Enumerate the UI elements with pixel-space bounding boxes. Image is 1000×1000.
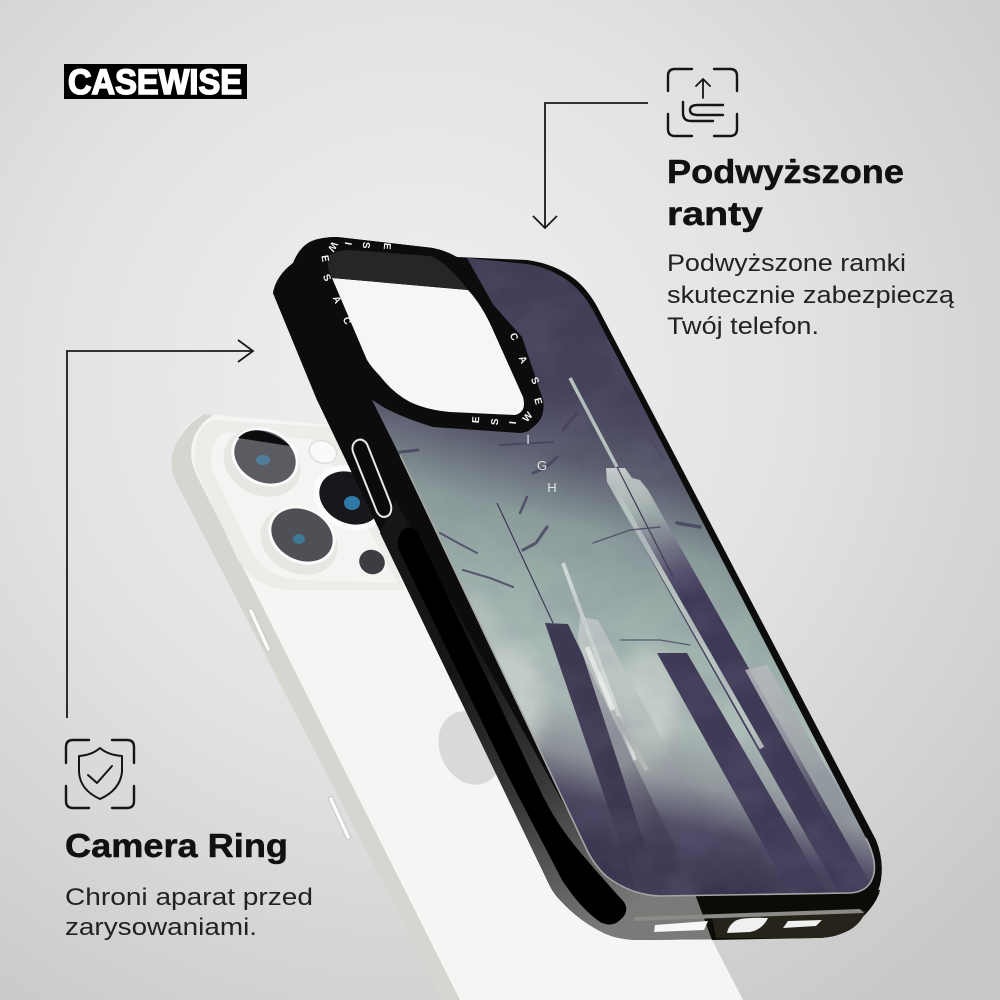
ring lettering: E — [471, 416, 482, 424]
tower: pale mist — [578, 617, 671, 838]
side button — [352, 440, 391, 517]
print letters: G — [537, 458, 547, 473]
text: camera ring description: Chroni aparat przed — [65, 884, 313, 911]
text: raised edges description: skutecznie zabezpieczą — [667, 282, 955, 309]
ring lettering: W — [325, 239, 339, 254]
ring inner wall — [328, 250, 468, 290]
tower: right pale top and dark base — [606, 468, 870, 884]
ring lettering — [318, 239, 544, 426]
ring lettering: S — [490, 418, 501, 426]
tower: right light — [745, 665, 850, 816]
print letters — [527, 435, 556, 492]
camera window — [332, 278, 524, 415]
tower: middle dark — [657, 653, 814, 872]
lens: top left — [212, 416, 312, 510]
heading: Podwyższone ranty: Podwyższone — [667, 153, 904, 190]
icon: shield — [66, 740, 134, 808]
heading: Podwyższone ranty — [667, 153, 904, 232]
lidar sensor — [355, 545, 389, 579]
light bars — [497, 378, 762, 770]
text: raised edges description: Twój telefon. — [667, 313, 819, 340]
arrow: camera ring — [67, 340, 253, 718]
frame side opening — [398, 528, 626, 925]
heading: Podwyższone ranty: ranty — [667, 195, 764, 232]
marble cracks — [398, 412, 702, 646]
ring lettering: A — [330, 294, 343, 306]
apple logo shadow — [427, 701, 513, 795]
print edge highlight — [400, 455, 874, 896]
ring lettering: E — [531, 397, 544, 406]
flash — [306, 437, 340, 467]
ring lettering: I — [342, 241, 353, 246]
bottom black lip — [695, 890, 880, 940]
port: speaker right — [783, 920, 822, 928]
ring lettering: C — [340, 315, 353, 327]
logo: CASEWISE: CASEWISE — [68, 63, 242, 102]
text: raised edges description — [667, 250, 955, 340]
phone side button — [248, 608, 271, 652]
camera ring — [273, 237, 544, 433]
tower: left dark — [545, 623, 671, 840]
ring lettering: C — [507, 331, 520, 343]
icon: raised edges — [668, 69, 737, 136]
white phone body — [171, 414, 743, 1000]
ring lettering: E — [318, 254, 331, 263]
phone lower side button — [328, 796, 351, 840]
arrow: raised edges — [533, 103, 648, 228]
ring lettering: S — [528, 376, 541, 387]
marble texture — [480, 313, 868, 895]
lens: bottom — [249, 494, 349, 588]
ring lettering: I — [508, 421, 519, 425]
black case — [273, 237, 882, 940]
text: camera ring description: zarysowaniami. — [65, 914, 257, 941]
ring lettering: W — [521, 410, 536, 425]
case outer shell — [273, 237, 882, 940]
lens: right — [302, 453, 398, 543]
case lower frame — [380, 500, 880, 940]
ring lettering: S — [320, 273, 333, 284]
ring lettering: E — [381, 242, 392, 250]
print letters: H — [547, 480, 557, 495]
port: charging — [727, 918, 768, 933]
port: speaker left — [654, 921, 708, 932]
heading: Camera Ring: Camera Ring — [65, 827, 288, 864]
camera module — [195, 416, 405, 590]
print letters: I — [526, 432, 530, 447]
text: raised edges description: Podwyższone ramki — [667, 250, 906, 277]
case print artwork — [372, 258, 874, 896]
text: camera ring description — [65, 884, 313, 941]
mist: pale clouds — [468, 596, 682, 748]
ring lettering: A — [516, 354, 529, 366]
ring lettering: S — [360, 241, 371, 249]
